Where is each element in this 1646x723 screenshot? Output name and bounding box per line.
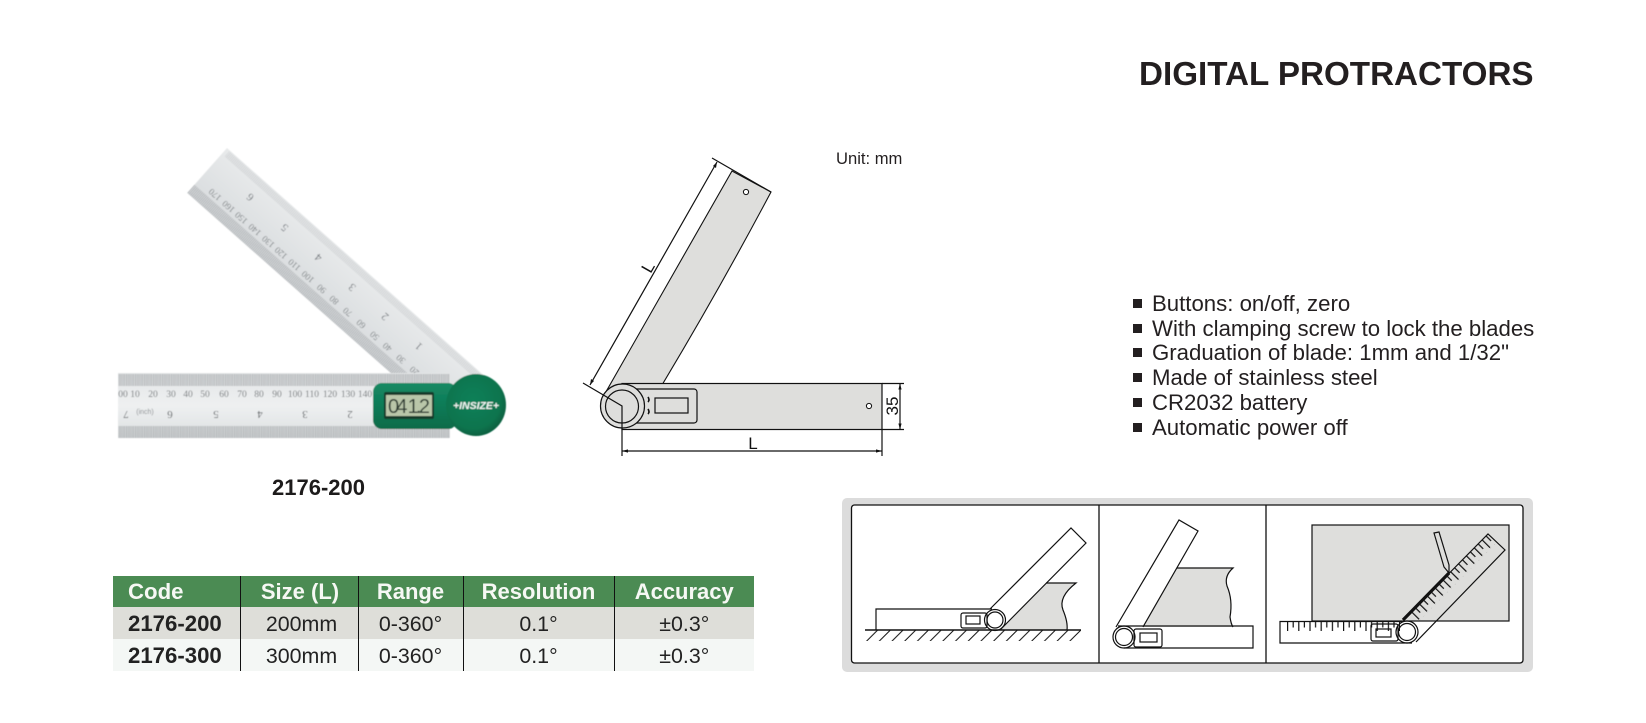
blade holes	[743, 189, 872, 409]
horizontal steel blade: 4	[257, 408, 263, 420]
row: 2176-300: 2176-300	[128, 643, 222, 668]
title: DIGITAL PROTRACTORS	[1139, 56, 1534, 93]
row: 2176-300: ±0.3°	[659, 644, 709, 668]
LCD readout	[384, 392, 434, 419]
row: 2176-200: 0-360°	[379, 612, 442, 636]
dimension L along angled blade: L	[638, 258, 659, 276]
horizontal steel blade: 3	[302, 408, 308, 420]
feature list	[1133, 291, 1534, 440]
usage 3: marking an angle with a pencil	[1280, 525, 1509, 643]
dimension L along angled blade	[583, 158, 882, 456]
horizontal steel blade: 80	[254, 390, 264, 400]
table header row: Size (L)	[261, 578, 339, 604]
angled steel blade: 4	[312, 251, 325, 263]
table header row	[113, 576, 754, 671]
angled steel blade: 5	[279, 221, 291, 234]
angled steel blade: 120	[272, 245, 289, 261]
angled steel blade: 130	[259, 233, 277, 250]
angled steel blade: 90	[314, 282, 328, 296]
pivot rings	[600, 384, 644, 428]
angled steel blade	[187, 148, 485, 422]
horizontal steel blade: 20	[148, 390, 158, 400]
row: 2176-300: 0-360°	[379, 644, 442, 668]
dimension L text: L	[748, 434, 758, 453]
horizontal blade	[622, 384, 882, 430]
table header row: Code	[128, 578, 183, 604]
angled steel blade: 100	[299, 268, 316, 285]
green pivot cap with logo: +INSIZE+	[453, 400, 499, 412]
row: 2176-300: 0.1°	[519, 644, 558, 668]
dimension 35	[882, 384, 904, 430]
horizontal steel blade: 00	[118, 390, 128, 400]
row: 2176-200	[113, 607, 754, 639]
horizontal steel blade: (inch)	[136, 409, 154, 416]
pencil	[1434, 532, 1449, 573]
horizontal steel blade: 70	[237, 390, 247, 400]
table header row: Resolution	[482, 578, 595, 604]
usage 1: outside angle on flat surface	[865, 528, 1086, 641]
horizontal steel blade: 5	[213, 408, 219, 420]
panel: usage illustrations	[842, 498, 1533, 672]
horizontal steel blade: 7	[123, 408, 129, 420]
angled steel blade: 30	[394, 352, 407, 366]
angled steel blade: 50	[367, 329, 381, 343]
horizontal steel blade: 2	[347, 408, 353, 420]
angled steel blade: 1	[413, 340, 425, 352]
unit label: Unit: mm	[836, 149, 902, 168]
feature: battery: CR2032 battery	[1152, 390, 1308, 415]
green display housing	[373, 383, 457, 429]
dimension 35: 35	[883, 397, 902, 415]
horizontal steel blade: 60	[219, 390, 229, 400]
angled blade	[607, 171, 771, 390]
specification table	[113, 576, 754, 671]
angled steel blade: 3	[346, 280, 358, 293]
panel frame	[842, 498, 1533, 672]
horizontal steel blade: 30	[166, 390, 176, 400]
table header row: Accuracy	[635, 578, 734, 604]
horizontal steel blade: 6	[167, 408, 173, 420]
horizontal steel blade: 50	[200, 390, 210, 400]
angled steel blade: 80	[327, 293, 341, 307]
feature: stainless steel: Made of stainless steel	[1152, 365, 1378, 390]
angled steel blade: 70	[340, 305, 354, 319]
horizontal steel blade: 130	[341, 390, 355, 400]
feature: graduation: Graduation of blade: 1mm and 1/32"	[1152, 340, 1509, 365]
row: 2176-200: 2176-200	[128, 611, 222, 636]
angled steel blade: 20	[407, 364, 421, 378]
angled steel blade: 60	[354, 317, 368, 331]
angled steel blade: 160	[220, 198, 237, 215]
row: 2176-200: 0.1°	[519, 612, 558, 636]
base ruler	[1280, 622, 1412, 643]
angled steel blade: 140	[246, 221, 263, 238]
feature: power off: Automatic power off	[1152, 415, 1349, 440]
angled steel blade: 110	[286, 257, 303, 273]
green pivot cap with logo	[446, 374, 506, 436]
display module	[625, 389, 697, 423]
horizontal steel blade: 90	[272, 390, 282, 400]
row: 2176-300	[113, 639, 754, 671]
angled steel blade: 6	[244, 190, 257, 203]
feature: buttons: Buttons: on/off, zero	[1152, 291, 1350, 316]
angled steel blade: 40	[380, 340, 394, 354]
horizontal steel blade	[118, 373, 450, 438]
LCD readout: 04 1.2	[388, 396, 430, 418]
horizontal steel blade: 110	[305, 390, 319, 400]
angled ruler ticks	[1409, 535, 1496, 623]
angled steel blade: 2	[379, 310, 391, 322]
product code label: 2176-200	[272, 475, 365, 500]
horizontal steel blade: 100	[288, 390, 302, 400]
feature: clamping screw: With clamping screw to lock the blades	[1152, 316, 1534, 341]
horizontal steel blade: 140	[358, 390, 372, 400]
horizontal steel blade: 10	[130, 390, 140, 400]
row: 2176-200: ±0.3°	[659, 612, 709, 636]
angled steel blade: 170	[206, 186, 223, 203]
table header row: Range	[377, 578, 444, 604]
horizontal steel blade: 120	[323, 390, 337, 400]
product photo: digital protractor	[118, 148, 506, 438]
usage 2: angle of workpiece	[1113, 520, 1253, 648]
row: 2176-300: 300mm	[266, 644, 337, 668]
row: 2176-200: 200mm	[266, 612, 337, 636]
horizontal steel blade: 40	[183, 390, 193, 400]
angled steel blade: 150	[232, 209, 250, 226]
dimension drawing	[583, 158, 904, 456]
